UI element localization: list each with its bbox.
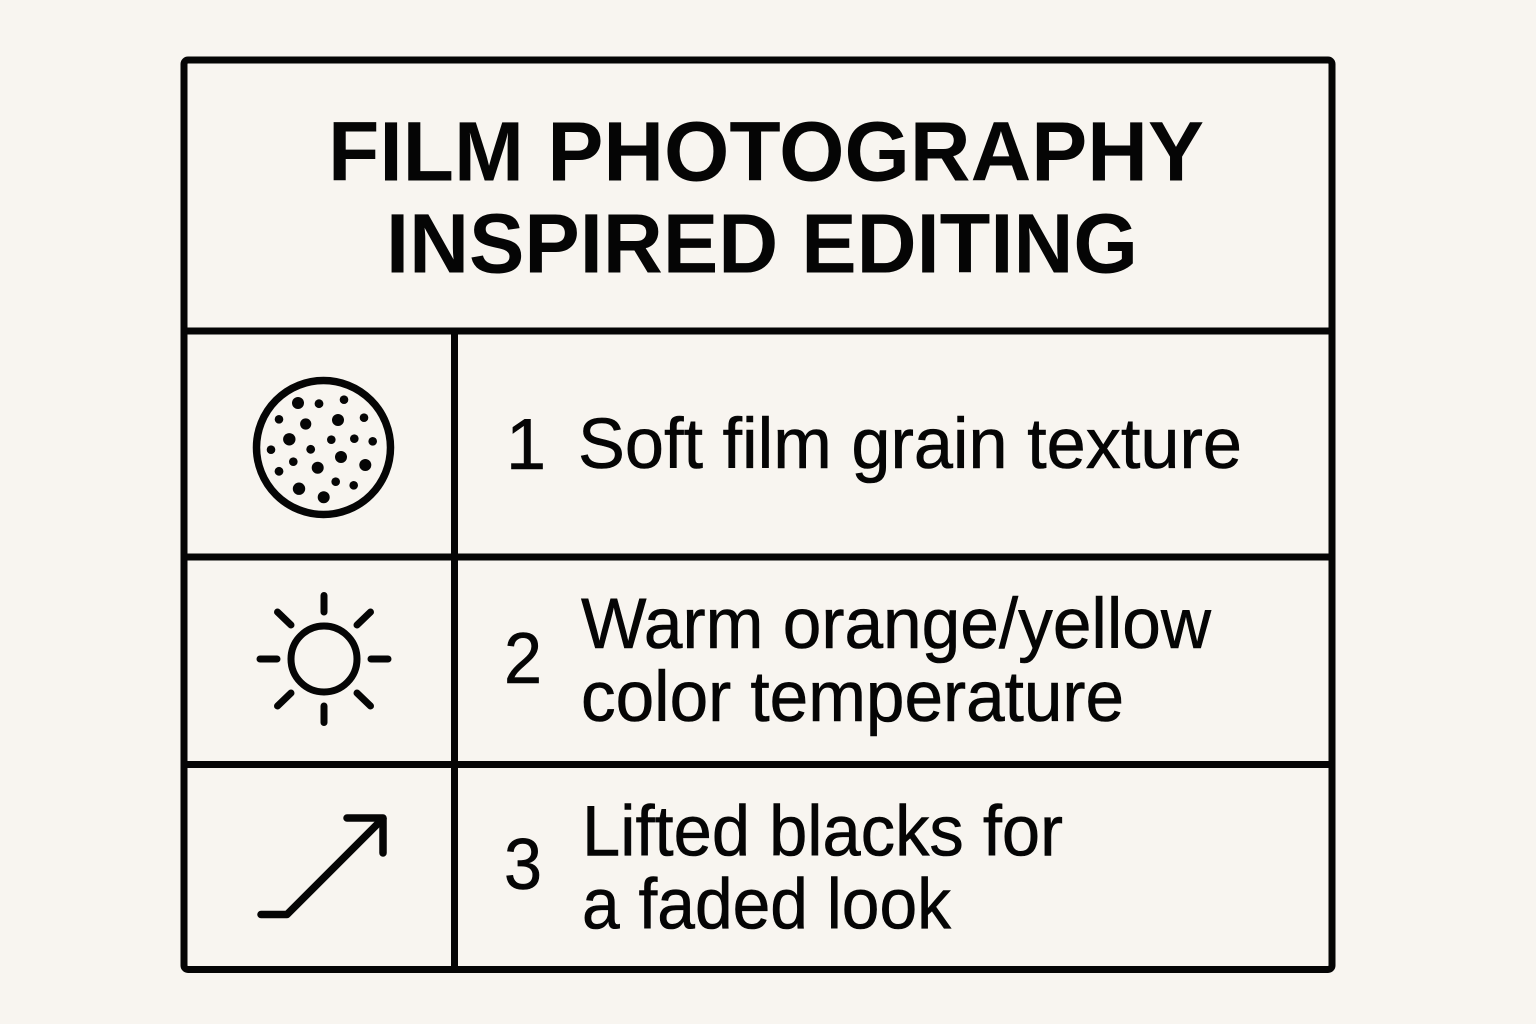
row 2 text bbox=[581, 585, 1212, 737]
row 1 number: 1 bbox=[506, 405, 546, 485]
icon: film grain bbox=[256, 380, 390, 514]
row 3 number: 3 bbox=[504, 825, 542, 905]
title bbox=[328, 104, 1204, 290]
row 1 text: Soft film grain texture bbox=[578, 405, 1242, 484]
title: FILM PHOTOGRAPHY bbox=[328, 104, 1204, 198]
title: INSPIRED EDITING bbox=[386, 196, 1138, 290]
icon: rising arrow bbox=[261, 818, 383, 914]
row 2 number: 2 bbox=[504, 619, 542, 699]
row 3 text: Lifted blacks for bbox=[582, 792, 1063, 872]
row 2 text: Warm orange/yellow bbox=[581, 585, 1212, 664]
row 3 text bbox=[582, 792, 1063, 944]
table frame bbox=[184, 60, 1332, 970]
icon: sun bbox=[260, 596, 388, 722]
row 3 text: a faded look bbox=[582, 866, 951, 944]
row 2 text: color temperature bbox=[581, 658, 1124, 737]
